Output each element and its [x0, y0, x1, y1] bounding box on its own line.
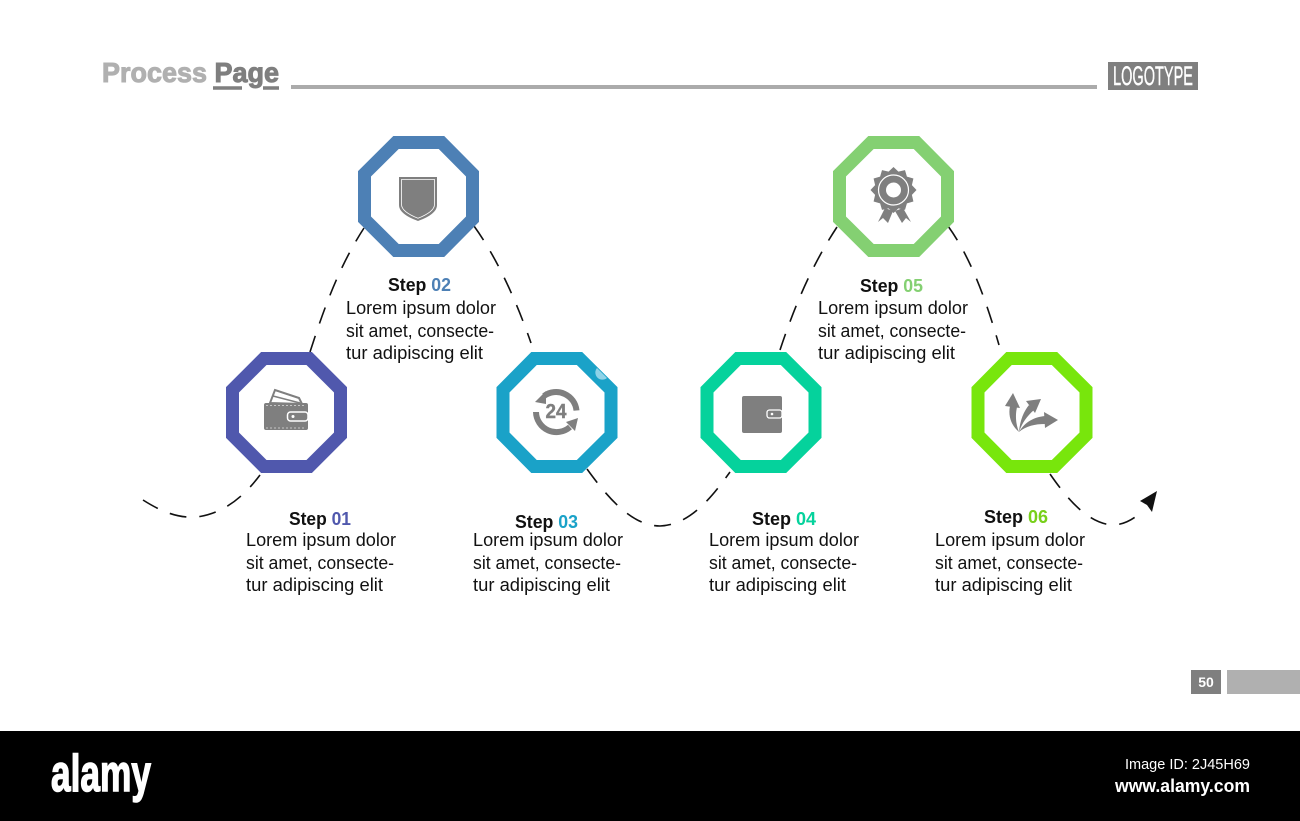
step 06 node: [978, 358, 1086, 466]
step 06 text: Lorem ipsum dolor: [935, 530, 1085, 550]
step 03 text: Lorem ipsum dolor: [473, 530, 623, 550]
icon: wallet: [742, 396, 782, 433]
icon: diverging arrows: [1005, 393, 1058, 432]
step 01 text: tur adipiscing elit: [246, 575, 383, 595]
step 05 node: [840, 142, 948, 250]
image id: Image ID: 2J45H69: [1125, 756, 1250, 773]
step 02 text: Lorem ipsum dolor: [346, 298, 496, 318]
header: [102, 57, 1198, 91]
website: www.alamy.com: [1114, 776, 1250, 796]
step 02 text: sit amet, consecte-: [346, 321, 494, 341]
page number: 50: [1198, 674, 1214, 690]
step 01 text: Lorem ipsum dolor: [246, 530, 396, 550]
step 04 text: tur adipiscing elit: [709, 575, 846, 595]
icon: award rosette: [870, 167, 916, 223]
dashed path with arrow: [143, 226, 1144, 526]
step 02 text: tur adipiscing elit: [346, 343, 483, 363]
arrow head: [1140, 491, 1157, 512]
footer bar: [0, 731, 1300, 821]
header rule: [291, 85, 1097, 89]
logotype: [1108, 61, 1198, 91]
step 04 text: sit amet, consecte-: [709, 553, 857, 573]
step 05 text: sit amet, consecte-: [818, 321, 966, 341]
step 06 text: Step 06: [984, 507, 1048, 527]
icon: 24 hours arrows: 24: [546, 401, 567, 423]
step 04 text: [709, 509, 859, 595]
logotype: LOGOTYPE: [1113, 61, 1193, 91]
step 03 text: [473, 512, 623, 595]
step 05 text: tur adipiscing elit: [818, 343, 955, 363]
title: Process Page: [102, 57, 279, 88]
step 01 text: Step 01: [289, 509, 351, 529]
step 06 text: [935, 507, 1085, 595]
page number: [1191, 670, 1300, 694]
step 02 node: [364, 142, 472, 250]
step 04 node: [707, 358, 815, 466]
step 05 text: Lorem ipsum dolor: [818, 298, 968, 318]
icon glint: [595, 368, 607, 380]
footer logo: alamy: [51, 745, 151, 803]
step 06 text: sit amet, consecte-: [935, 553, 1083, 573]
step 01 node: [232, 358, 340, 466]
step 06 text: tur adipiscing elit: [935, 575, 1072, 595]
step 03 text: tur adipiscing elit: [473, 575, 610, 595]
step 04 text: Lorem ipsum dolor: [709, 530, 859, 550]
step 01 text: [246, 509, 396, 595]
step 04 text: Step 04: [752, 509, 816, 529]
icon: wallet with card: [264, 390, 308, 430]
step 03 text: Step 03: [515, 512, 578, 532]
step 03 node: [503, 358, 611, 466]
step 05 text: Step 05: [860, 276, 923, 296]
step 01 text: sit amet, consecte-: [246, 553, 394, 573]
step 03 text: sit amet, consecte-: [473, 553, 621, 573]
icon: shield: [399, 177, 437, 221]
step 05 text: [818, 276, 968, 363]
step 02 text: Step 02: [388, 275, 451, 295]
title underline: [213, 86, 279, 90]
step 02 text: [346, 275, 496, 363]
